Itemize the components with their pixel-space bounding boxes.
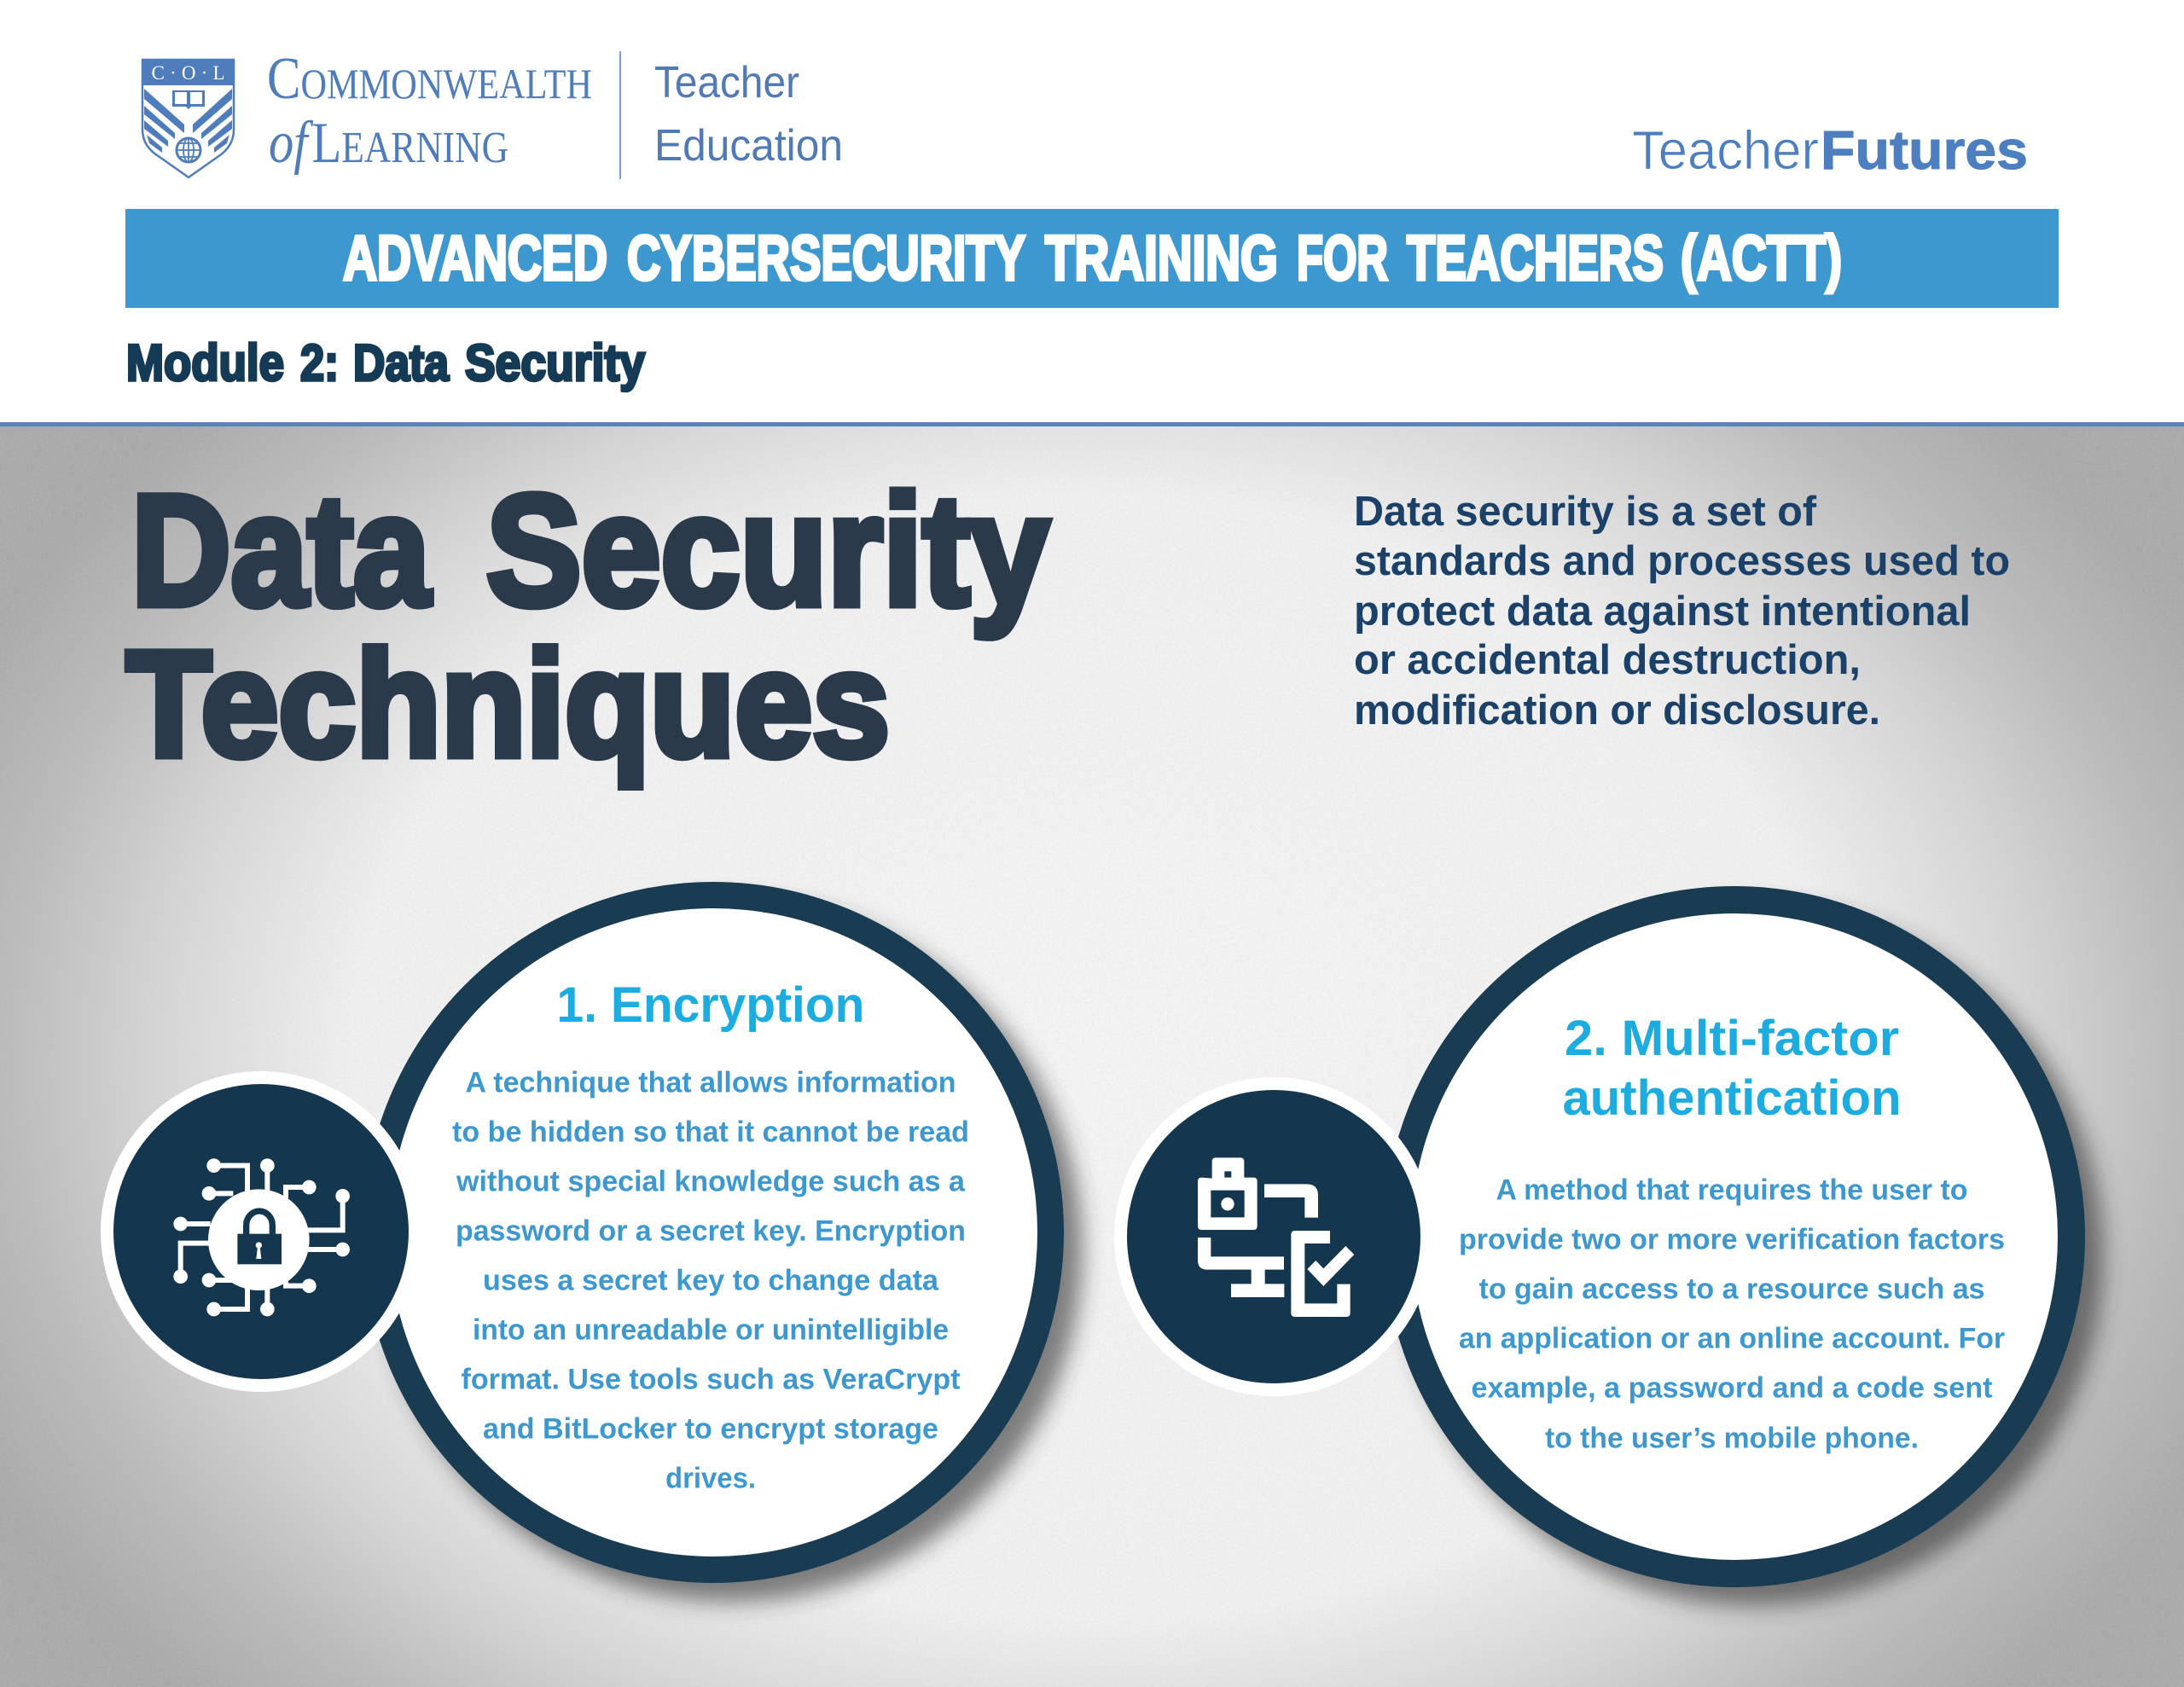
heading: multi-factor authentication <box>1563 1011 1901 1126</box>
module heading: Module <box>126 334 284 391</box>
encryption description: into an unreadable or unintelligible <box>473 1313 949 1346</box>
authentication description <box>1459 1174 2005 1455</box>
panel: multi-factor authentication <box>1114 886 2104 1606</box>
module heading: Data <box>353 334 450 391</box>
encryption description: format. Use tools such as VeraCrypt <box>461 1363 961 1395</box>
encryption description: password or a secret key. Encryption <box>456 1215 966 1247</box>
main title <box>126 463 1049 788</box>
white header background <box>0 0 2184 422</box>
logo text: Teacher Education <box>654 58 843 171</box>
intro text: standards and processes used to <box>1354 538 2010 584</box>
module heading: Security <box>465 334 646 391</box>
banner title: TRAINING <box>1045 223 1278 293</box>
logo text: Teacher Education: Teacher <box>654 58 799 107</box>
icon badge: authentication <box>1114 1077 1433 1396</box>
icon: COL shield <box>142 60 234 177</box>
banner title: ADVANCED <box>343 223 607 293</box>
main title: Security <box>486 463 1049 639</box>
authentication description: provide two or more verification factors <box>1459 1223 2005 1255</box>
authentication description: to the user’s mobile phone. <box>1545 1423 1919 1455</box>
encryption description: A technique that allows information <box>466 1066 956 1099</box>
banner title: TEACHERS <box>1407 223 1664 293</box>
encryption description: drives. <box>665 1462 756 1494</box>
encryption description: without special knowledge such as a <box>456 1165 966 1197</box>
intro text: or accidental destruction, <box>1354 637 1861 683</box>
logo text: Commonwealth: COMMONWEALTH <box>267 46 592 112</box>
module heading: 2: <box>300 334 339 391</box>
encryption description: uses a secret key to change data <box>483 1264 939 1296</box>
heading: multi-factor authentication: authentication <box>1563 1070 1901 1126</box>
intro text <box>1354 489 2010 733</box>
icon: circuit padlock <box>173 1158 350 1316</box>
authentication description: A method that requires the user to <box>1496 1174 1967 1206</box>
logo: Commonwealth of Learning <box>142 46 592 177</box>
banner title <box>343 223 1842 293</box>
main title: Techniques <box>126 621 890 788</box>
intro text: protect data against intentional <box>1354 588 1971 635</box>
intro text: modification or disclosure. <box>1354 687 1880 733</box>
logo text: Teacher Education: Education <box>654 121 843 171</box>
logo: TeacherFutures <box>1632 119 2028 181</box>
icon badge: encryption <box>101 1071 421 1392</box>
banner title: FOR <box>1297 223 1388 293</box>
encryption description: and BitLocker to encrypt storage <box>483 1412 938 1445</box>
main title: Data <box>131 463 432 639</box>
heading: multi-factor authentication: 2. Multi-factor <box>1565 1011 1899 1066</box>
intro text: Data security is a set of <box>1354 489 1817 535</box>
panel: encryption <box>101 882 1083 1602</box>
module heading <box>126 334 646 391</box>
encryption description <box>452 1066 969 1494</box>
banner title: CYBERSECURITY <box>627 223 1025 293</box>
authentication description: an application or an online account. For <box>1459 1322 2005 1354</box>
banner <box>125 209 2059 308</box>
authentication description: example, a password and a code sent <box>1471 1371 1993 1404</box>
authentication description: to gain access to a resource such as <box>1479 1272 1984 1305</box>
heading: encryption: 1. Encryption <box>556 977 865 1033</box>
icon: lock, computer and checkmark <box>1198 1157 1354 1317</box>
icon: COL shield: C·O·L <box>152 62 225 84</box>
logo: TeacherFutures: Teacher <box>1632 119 1819 181</box>
banner title: (ACTT) <box>1681 223 1842 293</box>
grey background panel <box>0 426 2184 1687</box>
encryption description: to be hidden so that it cannot be read <box>452 1116 969 1148</box>
logo text: of Learning: ofLEARNING <box>269 110 508 176</box>
logo: TeacherFutures: Futures <box>1821 119 2028 181</box>
